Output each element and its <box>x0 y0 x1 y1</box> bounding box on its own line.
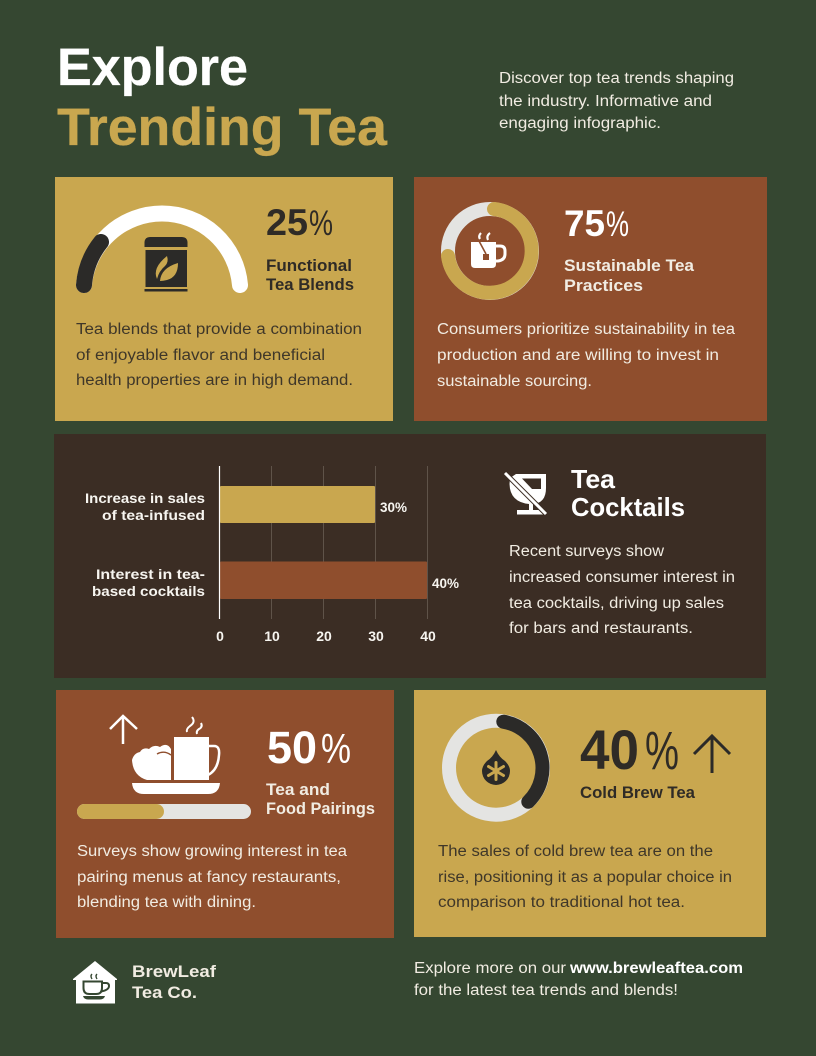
call to action: Explore more on our <box>414 960 566 977</box>
description: comparison to traditional hot tea. <box>438 894 685 911</box>
description: health properties are in high demand. <box>76 372 353 389</box>
stat 40%: % <box>645 721 679 781</box>
axis labels: 20 <box>316 628 332 644</box>
heading: functional tea blends: Functional <box>266 257 352 275</box>
icon: up arrow <box>110 716 137 744</box>
icon: cold drop <box>482 750 510 785</box>
icon: up arrow <box>694 736 730 773</box>
heading: sustainable tea practices: Sustainable Tea <box>564 257 695 275</box>
stat 40% <box>580 718 679 781</box>
intro text: engaging infographic. <box>499 115 661 132</box>
bar labels: Increase in sales <box>85 490 205 506</box>
axis labels: 30 <box>368 628 384 644</box>
call to action: www.brewleaftea.com <box>569 960 743 977</box>
description: production and are willing to invest in <box>437 347 719 364</box>
description: of enjoyable flavor and beneficial <box>76 347 325 364</box>
title: Explore <box>57 38 248 97</box>
panel: sustainable tea practices <box>414 177 767 421</box>
heading: tea and food pairings <box>266 781 375 818</box>
axis labels: 10 <box>264 628 280 644</box>
description: tea cocktails, driving up sales <box>509 595 724 612</box>
heading: functional tea blends: Tea Blends <box>266 276 354 294</box>
axis labels: 40 <box>420 628 436 644</box>
heading: sustainable tea practices: Practices <box>564 277 643 295</box>
bar values: 30% <box>380 500 407 515</box>
description: Surveys show growing interest in tea <box>77 843 347 860</box>
stat 75%: % <box>606 205 629 244</box>
heading: functional tea blends <box>266 257 354 294</box>
panel: functional tea blends <box>55 177 393 421</box>
description: The sales of cold brew tea are on the <box>438 843 713 860</box>
description <box>77 843 347 911</box>
brand name: Tea Co. <box>132 983 197 1002</box>
description <box>509 543 735 637</box>
axis labels <box>216 628 436 644</box>
bar labels: Interest in tea- <box>96 566 205 582</box>
title <box>57 38 388 157</box>
description: rise, positioning it as a popular choice in <box>438 869 732 886</box>
progress bar 50% <box>77 804 251 819</box>
stat 50% <box>267 722 351 773</box>
gauge chart 25% <box>84 214 240 285</box>
description <box>438 843 732 911</box>
icon: food and tea cup <box>132 717 220 794</box>
description: Tea blends that provide a combination <box>76 321 362 338</box>
footer <box>73 960 743 1004</box>
icon: tea mug <box>471 233 505 268</box>
donut chart 40% <box>449 721 543 815</box>
description: for bars and restaurants. <box>509 620 693 637</box>
description: Recent surveys show <box>509 543 665 560</box>
bar labels: of tea-infused <box>102 507 205 523</box>
brand name: BrewLeaf <box>132 962 216 981</box>
intro text: Discover top tea trends shaping <box>499 70 734 87</box>
description: pairing menus at fancy restaurants, <box>77 869 341 886</box>
stat 40%: 40 <box>580 718 639 781</box>
call to action <box>414 960 743 999</box>
heading: tea cocktails <box>571 464 685 522</box>
bar labels: based cocktails <box>92 583 205 599</box>
title: Trending Tea <box>57 98 388 157</box>
intro text <box>499 70 734 132</box>
description <box>76 321 362 389</box>
description: Consumers prioritize sustainability in tea <box>437 321 735 338</box>
axis labels: 0 <box>216 628 224 644</box>
description: increased consumer interest in <box>509 569 735 586</box>
stat 25% <box>266 202 333 243</box>
brand name <box>132 962 216 1002</box>
heading: tea and food pairings: Food Pairings <box>266 800 375 818</box>
panel: tea and food pairings <box>56 690 394 938</box>
heading: tea cocktails: Tea <box>571 464 616 494</box>
stat 75% <box>564 203 629 244</box>
heading: cold brew tea: Cold Brew Tea <box>580 784 696 802</box>
logo icon: house with cup <box>73 961 117 1004</box>
stat 50%: 50 <box>267 722 317 773</box>
bar labels <box>85 490 205 599</box>
intro text: the industry. Informative and <box>499 93 712 110</box>
heading: tea and food pairings: Tea and <box>266 781 330 799</box>
donut chart 75% <box>448 209 532 293</box>
panel: cold brew tea <box>414 690 766 937</box>
icon: tea tin <box>144 237 188 292</box>
bar values: 40% <box>432 576 459 591</box>
heading: sustainable tea practices <box>564 257 695 295</box>
icon: no cocktail glass <box>504 472 547 515</box>
description: sustainable sourcing. <box>437 373 592 390</box>
bar values <box>380 500 459 591</box>
bar chart <box>85 466 459 644</box>
stat 25%: 25 <box>266 202 308 243</box>
stat 75%: 75 <box>564 203 605 244</box>
description: blending tea with dining. <box>77 894 256 911</box>
panel: tea cocktails <box>54 434 766 678</box>
bar: cocktail interest 40% <box>220 562 427 599</box>
stat 25%: % <box>309 204 333 243</box>
bar: tea-infused sales 30% <box>220 486 375 523</box>
stat 50%: % <box>321 725 351 772</box>
heading: tea cocktails: Cocktails <box>571 492 685 522</box>
header: title and intro <box>57 38 734 157</box>
call to action: for the latest tea trends and blends! <box>414 982 678 999</box>
description <box>437 321 735 390</box>
